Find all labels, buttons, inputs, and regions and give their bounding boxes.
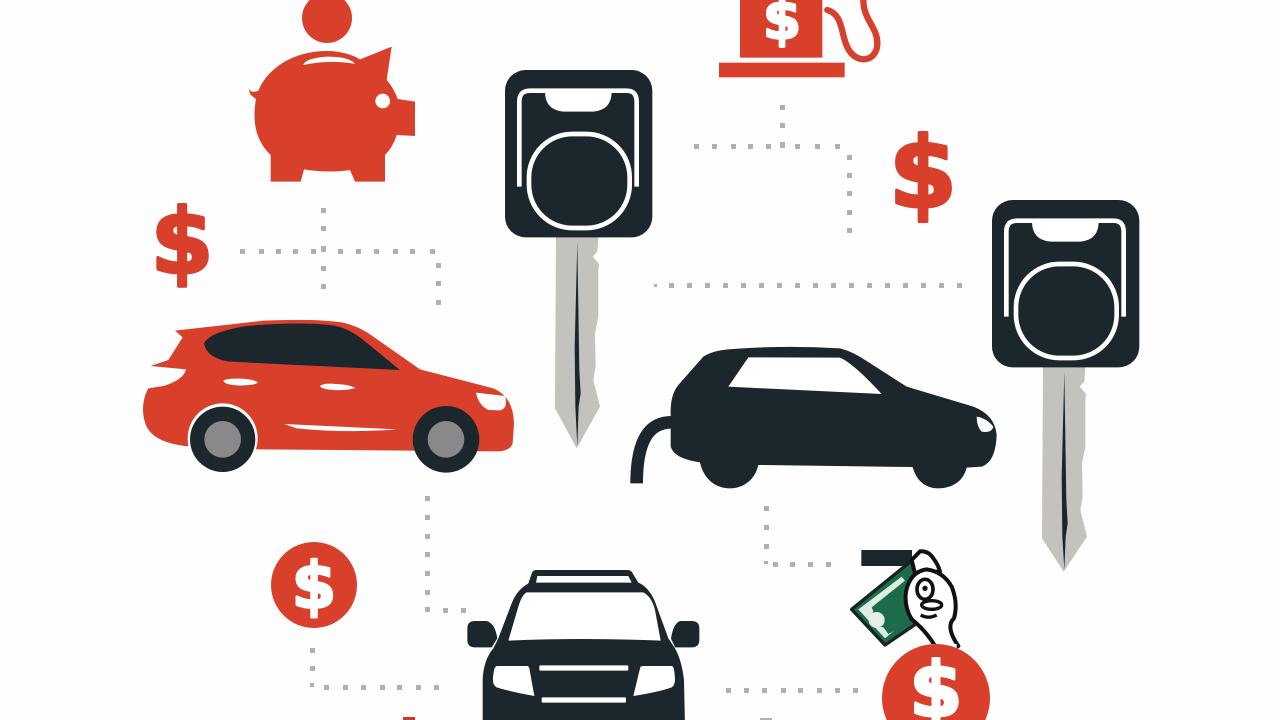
icon: fuel pump with dollar: [719, 0, 877, 77]
icon: dollar sign left: $: [151, 190, 213, 295]
icon: red hatchback car: [143, 320, 514, 473]
icon: hand holding banknote: [852, 550, 958, 653]
icon: dollar coin left: [271, 542, 357, 628]
icon: dollar coin left: $: [292, 550, 336, 624]
icon: red marker at bottom edge: [403, 717, 415, 720]
icon: dollar coin bottom right: [882, 644, 990, 720]
icon: car key right: [992, 200, 1139, 572]
icon: dark electric car with plug cable: [637, 347, 997, 488]
icon: dark car front view: [467, 570, 699, 720]
icon: piggy bank: [248, 47, 415, 182]
icon: dollar sign upper right: $: [889, 117, 957, 231]
icon: coin above piggy bank: [302, 0, 352, 43]
icon: car key center: [505, 70, 652, 448]
